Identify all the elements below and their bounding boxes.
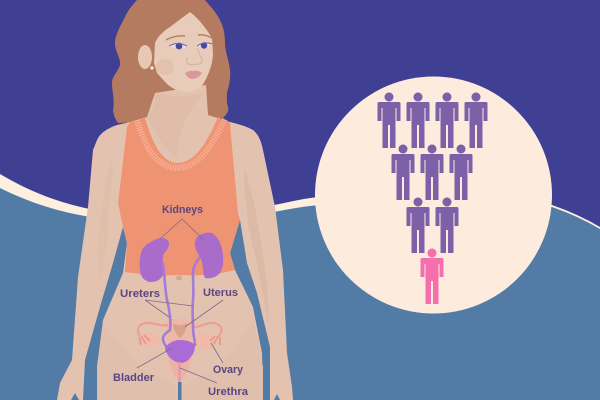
face [138,12,213,92]
pelvis shading [97,322,178,400]
gap between left arm and body [83,227,127,400]
urinary tract [140,233,223,382]
urethra [178,362,181,382]
group of people: purple figures [378,92,488,253]
tank top ribbed collar [137,119,225,168]
ovaries [141,332,159,348]
label: Uterus: Uterus [203,287,238,299]
vaginal canal [168,357,192,382]
label: Ureters: Ureters [120,288,160,300]
label: Kidneys: Kidneys [162,204,203,216]
earring [150,66,154,70]
navel [176,276,182,280]
leader lines [137,219,223,383]
eyebrows [166,35,212,40]
background: cream wave band [0,174,600,400]
arm shading right [244,170,268,325]
gap between legs [178,382,182,400]
ear [138,45,152,69]
background: blue wave [0,188,600,400]
label: Urethra: Urethra [208,386,249,398]
circle panel: statistic [315,76,552,314]
fallopian tubes [138,323,221,337]
tank top [118,117,240,275]
label: Ovary: Ovary [213,364,244,376]
uterus inner [173,323,187,338]
fimbriae [139,335,220,345]
right kidney [195,233,223,278]
thumb gaps [71,393,280,400]
woman figure [57,0,293,400]
arm shading left [99,160,113,280]
neck shading [147,92,205,160]
gap between right arm and body [230,220,270,400]
blush [156,59,174,75]
body skin silhouette [57,85,293,400]
hair [112,0,230,123]
lips [185,71,202,79]
pink figure: one person highlighted [420,248,444,304]
nose [187,48,202,65]
head shape [154,12,213,92]
label: Bladder: Bladder [113,372,155,384]
ureters [163,257,200,348]
uterus surround [166,319,195,350]
bladder [165,340,195,363]
reproductive organs [138,319,221,382]
eyes [169,43,212,48]
left kidney [140,238,169,282]
